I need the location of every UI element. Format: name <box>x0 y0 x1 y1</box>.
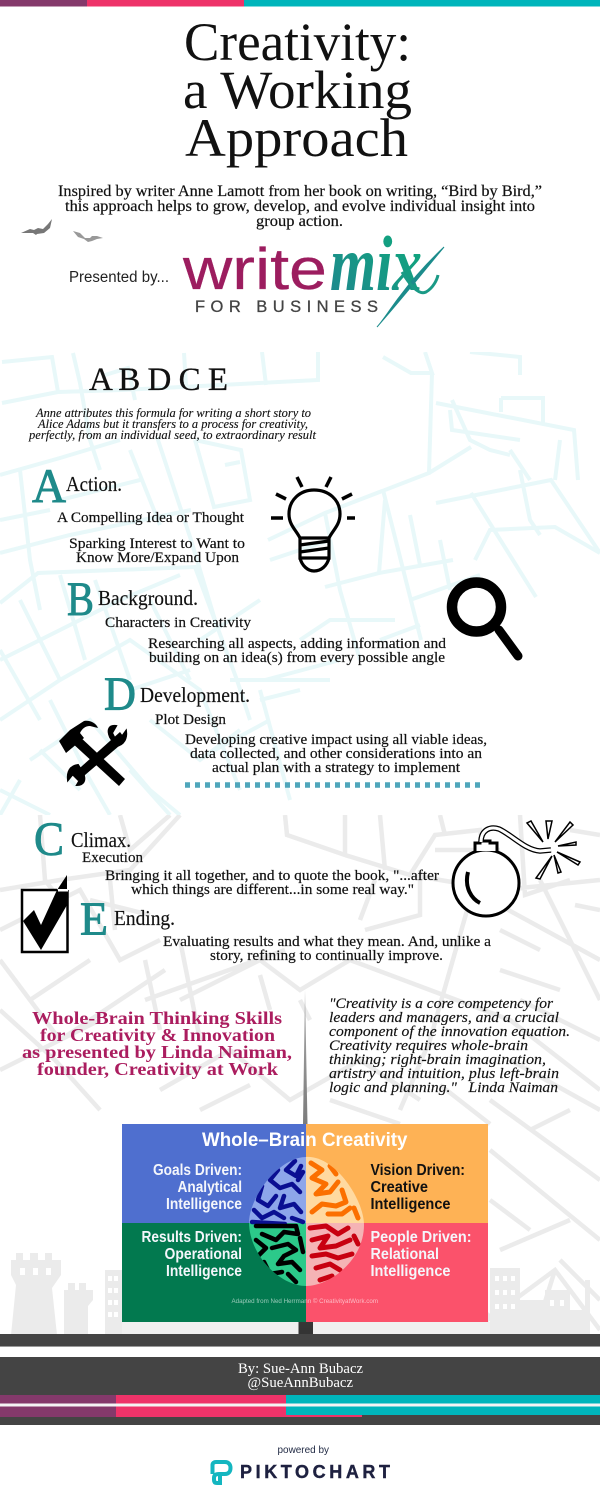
section B: background: Researching all aspects, adding information and <box>148 636 447 652</box>
brain illustration <box>249 1156 364 1286</box>
logo: writemix for business: write <box>182 237 327 302</box>
section E: ending: story, refining to continually improve. <box>210 948 443 964</box>
section D: development: data collected, and other considerations into an <box>190 746 483 762</box>
heading: whole-brain thinking skills: for Creativity & Innovation <box>40 1025 275 1045</box>
section A: action: Know More/Expand Upon <box>76 550 240 566</box>
section E: ending: E <box>80 893 108 946</box>
italic intro to formula: Anne attributes this formula for writing a short story to <box>35 406 311 420</box>
quadrant: people driven <box>370 1229 472 1280</box>
icon: bomb <box>453 821 580 916</box>
section D: development: actual plan with a strategy to implement <box>212 760 461 776</box>
quadrant: vision driven: Intelligence <box>370 1196 451 1213</box>
section D: development: Plot Design <box>155 712 226 728</box>
section C: climax: Execution <box>82 850 143 866</box>
section E: ending <box>80 893 491 964</box>
dotted divider <box>185 782 480 788</box>
section D: development: D <box>104 668 136 721</box>
heading: whole-brain thinking skills: as presented by Linda Naiman, <box>22 1042 292 1062</box>
heading: A B D C E: A B D C E <box>89 362 228 398</box>
quadrant: results driven: Results Driven: <box>142 1229 242 1246</box>
map pattern: gray <box>0 815 600 1350</box>
title: Approach <box>185 108 408 168</box>
section B: background: Background. <box>98 586 198 610</box>
footer credit band <box>0 1357 600 1425</box>
title: Creativity: <box>184 12 411 72</box>
powered by: powered by <box>278 1444 330 1456</box>
chart: whole-brain creativity quadrants <box>122 1124 488 1322</box>
quadrant: goals driven: Analytical <box>178 1179 242 1196</box>
quote by Linda Naiman: logic and planning." Linda Naiman <box>329 1080 558 1096</box>
quadrant: people driven: Relational <box>370 1246 439 1263</box>
ground band <box>0 1334 600 1347</box>
author handle: @SueAnnBubacz <box>248 1375 353 1391</box>
heading: whole-brain thinking skills: founder, Creativity at Work <box>37 1059 278 1079</box>
icon: light bulb <box>271 477 355 571</box>
quadrant: vision driven <box>370 1162 465 1213</box>
title: a Working <box>183 60 412 120</box>
quote by Linda Naiman: leaders and managers, and a crucial <box>329 1010 559 1026</box>
section D: development: Development. <box>140 683 250 707</box>
chart title: Whole–Brain Creativity <box>202 1129 408 1151</box>
icon: magnifying glass <box>452 582 518 656</box>
colour stripes <box>0 1395 600 1417</box>
quadrant: vision driven: Creative <box>370 1179 428 1196</box>
quote by Linda Naiman: thinking; right-brain imagination, <box>329 1052 546 1068</box>
section C: climax: Climax. <box>71 828 131 852</box>
logo: writemix for business: FOR BUSINESS <box>195 298 378 316</box>
map pattern: light teal <box>0 352 600 815</box>
quote by Linda Naiman: Creativity requires whole-brain <box>329 1038 528 1054</box>
section B: background: Characters in Creativity <box>105 615 251 631</box>
quadrant: vision driven: Vision Driven: <box>370 1162 465 1179</box>
author name: By: Sue-Ann Bubacz <box>238 1361 363 1377</box>
section E: ending: Ending. <box>114 906 175 930</box>
section C: climax: Bringing it all together, and to quote the book, "...after <box>105 868 439 884</box>
section B: background: building on an idea(s) from every possible angle <box>149 650 445 666</box>
section C: climax: which things are different...in some real way." <box>131 882 414 898</box>
logo: writemix for business <box>182 220 444 327</box>
quadrant: people driven: People Driven: <box>370 1229 472 1246</box>
piktochart logo: PIKTOCHART <box>240 1462 390 1482</box>
section A: action: A Compelling Idea or Thought <box>57 510 245 526</box>
section A: action: A <box>32 460 66 513</box>
quadrant: results driven <box>142 1229 242 1280</box>
section A: action <box>32 460 245 566</box>
section C: climax <box>34 813 439 898</box>
heading: whole-brain thinking skills: Whole-Brain Thinking Skills <box>32 1008 282 1028</box>
section D: development: Developing creative impact using all viable ideas, <box>185 732 487 748</box>
italic intro to formula: Alice Adams but it transfers to a process for creativity, <box>37 417 308 431</box>
quadrant: results driven: Intelligence <box>166 1263 242 1280</box>
title <box>183 12 412 168</box>
intro text: group action. <box>256 213 343 230</box>
logo: writemix for business: mix <box>330 220 422 307</box>
quote by Linda Naiman <box>329 996 570 1096</box>
section C: climax: C <box>34 813 64 866</box>
intro text <box>58 183 542 230</box>
quote by Linda Naiman: "Creativity is a core competency for <box>329 996 553 1012</box>
section A: action: Sparking Interest to Want to <box>69 536 245 552</box>
quadrant: goals driven: Goals Driven: <box>153 1162 242 1179</box>
presented by: Presented by... <box>69 269 169 286</box>
top colour bar <box>0 0 600 6</box>
quadrant: goals driven <box>153 1162 242 1213</box>
heading: whole-brain thinking skills <box>22 1008 292 1079</box>
italic intro to formula <box>28 406 317 442</box>
quote by Linda Naiman: artistry and intuition, plus left-brain <box>329 1066 559 1082</box>
intro text: Inspired by writer Anne Lamott from her book on writing, “Bird by Bird,” <box>58 183 542 200</box>
intro text: this approach helps to grow, develop, and evolve individual insight into <box>65 198 535 215</box>
section A: action: Action. <box>66 472 122 496</box>
icon: bats <box>21 219 103 242</box>
section D: development <box>104 668 487 776</box>
chart credit: Adapted from Ned Herrmann © CreativityatWork.com <box>232 1298 378 1305</box>
quote by Linda Naiman: component of the innovation equation. <box>329 1024 570 1040</box>
section B: background: B <box>67 573 94 626</box>
icon: hammer and wrench <box>59 721 126 786</box>
quadrant: results driven: Operational <box>164 1246 242 1263</box>
section E: ending: Evaluating results and what they mean. And, unlike a <box>163 934 491 950</box>
icon: checkbox <box>22 875 68 952</box>
spire divider <box>298 990 313 1335</box>
italic intro to formula: perfectly, from an individual seed, to extraordinary result <box>28 428 317 442</box>
section B: background <box>67 573 447 666</box>
skyline: buildings <box>11 1253 590 1335</box>
quadrant: people driven: Intelligence <box>370 1263 451 1280</box>
quadrant: goals driven: Intelligence <box>166 1196 242 1213</box>
